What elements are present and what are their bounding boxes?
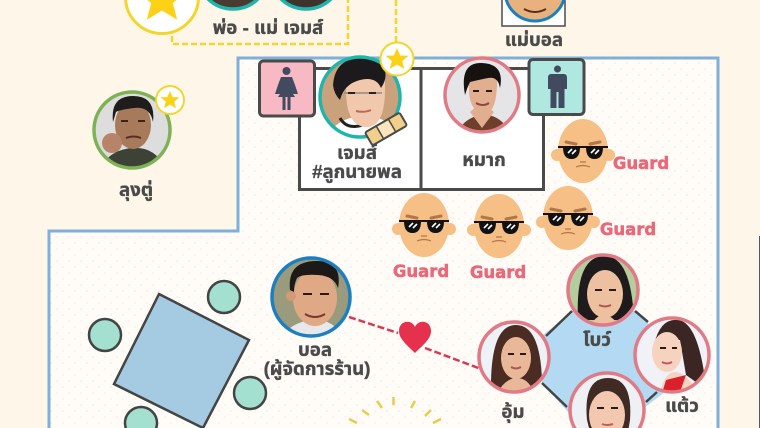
dashed connector: parents: [172, 0, 348, 44]
bandage icon: [365, 113, 407, 145]
guard 4: [536, 186, 600, 250]
Oom portrait: [479, 322, 549, 395]
Bow portrait: [568, 255, 638, 330]
label: parents: พ่อ - แม่ เจมส์: [213, 17, 323, 38]
label: James: #ลูกนายพล: [312, 161, 402, 183]
photo: father: [206, 0, 260, 11]
label: Mae Bol: แม่บอล: [505, 29, 563, 50]
label: James: เจมส์: [337, 142, 377, 163]
James portrait: [320, 57, 400, 140]
photo: mother: [280, 0, 332, 11]
bottom woman portrait: [570, 373, 644, 428]
Lung Tu portrait: [94, 92, 170, 170]
Taew portrait: [635, 318, 709, 392]
guard label 2: Guard: [393, 262, 449, 281]
label: Mak: หมาก: [462, 149, 506, 170]
guard label 1: Guard: [613, 154, 669, 173]
dashed line: Bol to Oom: [349, 317, 481, 369]
women's table outline: [542, 311, 657, 407]
floor plan: [49, 58, 718, 428]
icon: heart: [399, 322, 431, 353]
label: Taew: แต้ว: [665, 395, 699, 416]
label: Bow: โบว์: [583, 329, 611, 350]
Mae Bol card: [502, 0, 565, 26]
square table with chairs: [89, 281, 266, 428]
Mak portrait: [445, 58, 519, 135]
label: Bol: บอล: [298, 339, 332, 360]
women's table: [542, 311, 665, 414]
label: Bol: (ผู้จัดการร้าน): [264, 358, 370, 380]
star badge: James: [380, 42, 414, 76]
rooms: [300, 68, 544, 190]
Bol portrait: [272, 258, 350, 340]
icon: male restroom: [529, 60, 584, 114]
label: Oom: อุ้ม: [501, 401, 525, 423]
guard label 4: Guard: [600, 220, 656, 239]
icon: female restroom: [260, 61, 314, 116]
guard 1: [551, 119, 615, 183]
sun rays: [349, 397, 441, 423]
guard 3: [467, 194, 531, 258]
label: Lung Tu: ลุงตู่: [119, 179, 153, 201]
dashed connector: James star: [395, 0, 397, 42]
right edge line: [759, 236, 760, 428]
star badge: parents: [126, 0, 198, 34]
guard label 3: Guard: [470, 263, 526, 282]
star badge: Lung Tu: [156, 86, 184, 114]
guard 2: [392, 193, 456, 257]
